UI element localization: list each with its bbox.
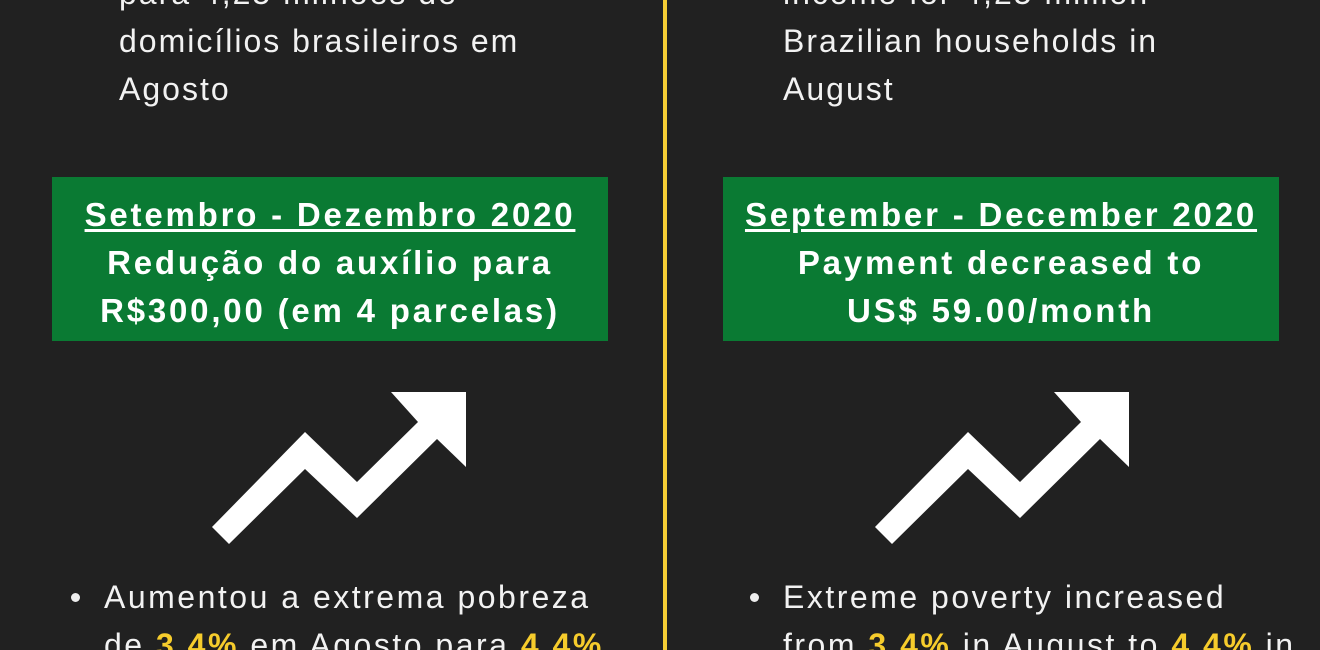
icon: right trend arrow bbox=[875, 392, 1129, 544]
panel: right green box: Payment decreased to bbox=[798, 244, 1204, 281]
text block: right top: August bbox=[783, 71, 895, 107]
panel: left green box: Redução do auxílio para bbox=[107, 244, 553, 281]
panel: right green box: September - December 2020 bbox=[745, 196, 1257, 233]
text block: right top: Brazilian households in bbox=[783, 23, 1158, 59]
icon: left trend arrow bbox=[212, 392, 466, 544]
panel: right green box bbox=[723, 177, 1279, 341]
divider: yellow vertical line bbox=[663, 0, 667, 650]
text block: left top bbox=[119, 0, 519, 107]
panel: left green box: R$300,00 (em 4 parcelas) bbox=[100, 292, 560, 329]
bullet: right: Extreme poverty increased bbox=[783, 579, 1226, 615]
panel: left green box: Setembro - Dezembro 2020 bbox=[85, 196, 575, 233]
panel: right green box: US$ 59.00/month bbox=[847, 292, 1155, 329]
text block: right top bbox=[783, 0, 1158, 107]
text block: left top: domicílios brasileiros em bbox=[119, 23, 519, 59]
bullet: left: Aumentou a extrema pobreza bbox=[104, 579, 591, 615]
bullet: right bbox=[750, 579, 1296, 650]
panel: left green box bbox=[52, 177, 608, 341]
bullet: left bbox=[71, 579, 604, 650]
text block: left top: Agosto bbox=[119, 71, 231, 107]
